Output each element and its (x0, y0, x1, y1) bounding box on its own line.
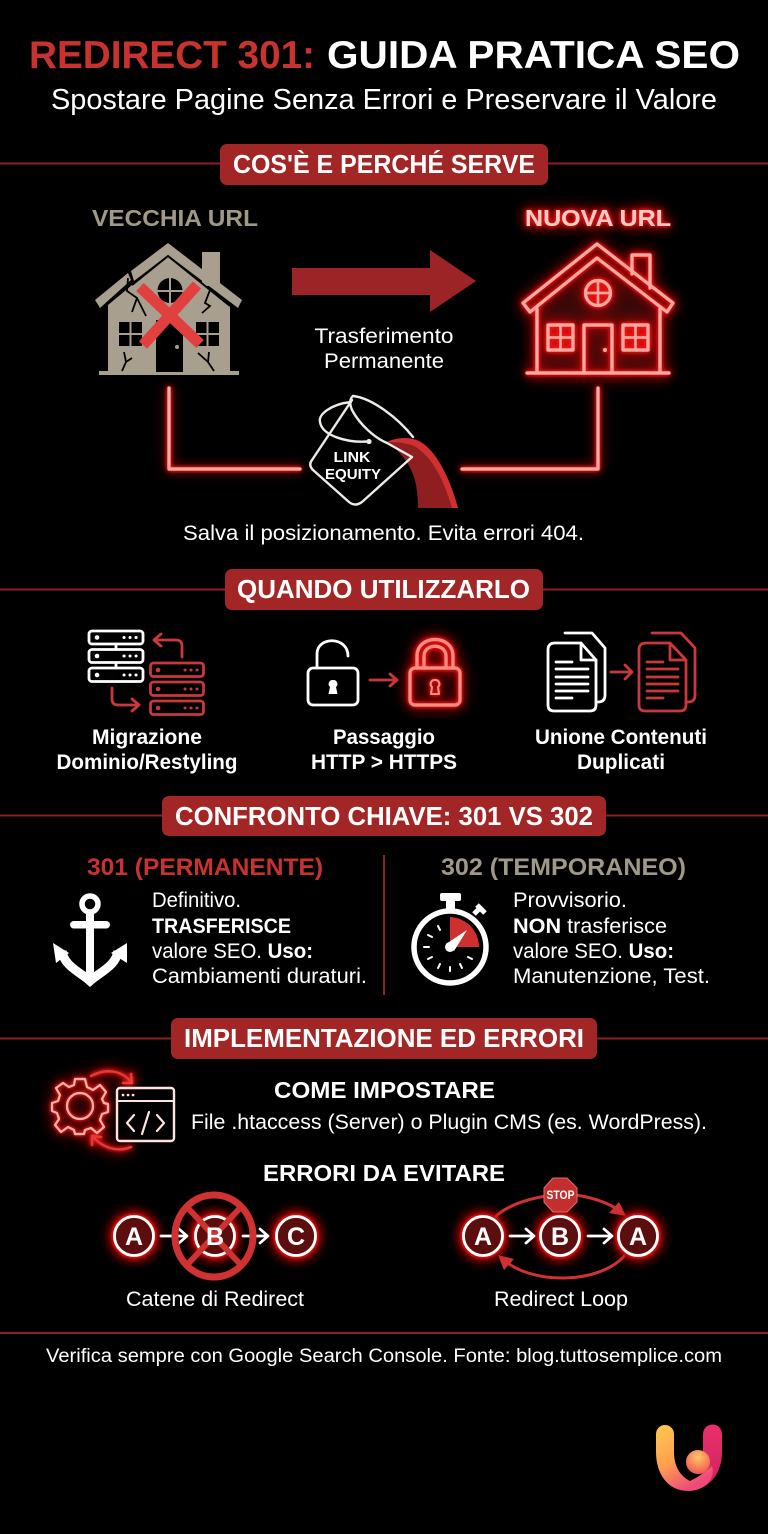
footer note: Verifica sempre con Google Search Console. Fonte: blog.tuttosemplice.com (46, 1346, 722, 1367)
icon: link equity bucket: EQUITY (325, 466, 381, 483)
label: migrazione (56, 726, 238, 774)
arrow: transfer (292, 250, 476, 312)
heading: 302 temporaneo: 302 (TEMPORANEO) (441, 854, 686, 881)
text: 302 description: Manutenzione, Test. (513, 965, 710, 988)
text: 302 description: Provvisorio. (513, 889, 627, 912)
icon: gear and code window (52, 1071, 174, 1149)
subtitle: Spostare Pagine Senza Errori e Preservare il Valore (51, 84, 717, 116)
connector: bucket to new url (462, 388, 598, 469)
text: trasferimento permanente (314, 324, 454, 373)
diagram: redirect loop: A (474, 1223, 492, 1251)
heading: confronto chiave: CONFRONTO CHIAVE: 301 VS 302 (175, 803, 593, 831)
label: redirect loop: Redirect Loop (494, 1288, 628, 1311)
heading: quando utilizzarlo (225, 569, 543, 610)
label: nuova url: NUOVA URL (525, 205, 671, 231)
icon: duplicate documents merged (548, 633, 695, 711)
text: 302 description (513, 889, 710, 988)
label: catene di redirect: Catene di Redirect (126, 1288, 304, 1311)
label: passaggio (311, 726, 457, 774)
heading: confronto chiave (162, 796, 606, 836)
label: unione contenuti: Duplicati (577, 751, 665, 774)
heading: errori da evitare: ERRORI DA EVITARE (263, 1160, 505, 1186)
text: 301 description (152, 889, 367, 988)
diagram: redirect chain (114, 1195, 316, 1277)
label: passaggio: Passaggio (333, 726, 435, 749)
text: 301 description: valore SEO. Uso: (152, 940, 313, 963)
heading: 301 permanente: 301 (PERMANENTE) (87, 854, 323, 881)
diagram: redirect loop (464, 1178, 658, 1278)
icon: server migration (89, 631, 204, 714)
label: unione contenuti: Unione Contenuti (535, 726, 707, 749)
text: trasferimento permanente: Trasferimento (314, 324, 454, 348)
label: migrazione: Migrazione (92, 726, 202, 749)
logo (656, 1424, 722, 1491)
heading: implementazione ed errori: IMPLEMENTAZIONE ED ERRORI (184, 1025, 584, 1053)
diagram: redirect chain: C (287, 1223, 305, 1251)
icon: stopwatch (414, 893, 486, 983)
icon: link equity bucket: LINK (334, 449, 371, 466)
text: trasferimento permanente: Permanente (324, 349, 444, 373)
icon: unlocked to locked (308, 640, 460, 705)
diagram: redirect loop: STOP (546, 1188, 574, 1202)
label: migrazione: Dominio/Restyling (56, 751, 238, 774)
label: passaggio: HTTP > HTTPS (311, 751, 457, 774)
diagram: redirect loop: A (629, 1223, 647, 1251)
text: 302 description: valore SEO. Uso: (513, 940, 674, 963)
connector: old url to bucket (169, 388, 300, 469)
title: GUIDA PRATICA SEO (327, 34, 740, 77)
heading: cos'è e perché serve (220, 144, 548, 185)
label: vecchia url: VECCHIA URL (92, 205, 258, 231)
text: 301 description: Cambiamenti duraturi. (152, 965, 367, 988)
heading: come impostare: COME IMPOSTARE (274, 1077, 495, 1103)
text: 301 description: Definitivo. (152, 889, 241, 912)
heading: cos'è e perché serve: COS'È E PERCHÉ SERVE (233, 150, 535, 179)
text: 302 description: NON trasferisce (513, 915, 667, 938)
icon: neon new house (523, 244, 673, 373)
title: REDIRECT 301: (29, 34, 315, 77)
diagram: redirect chain: A (125, 1223, 143, 1251)
icon: link equity bucket (310, 396, 458, 508)
diagram: redirect loop: B (551, 1223, 569, 1251)
diagram: redirect chain: B (206, 1223, 224, 1251)
heading: quando utilizzarlo: QUANDO UTILIZZARLO (237, 576, 530, 604)
heading: implementazione ed errori (171, 1018, 597, 1059)
text: 301 description: TRASFERISCE (152, 915, 291, 938)
text: come impostare description: File .htaccess (Server) o Plugin CMS (es. WordPress). (191, 1111, 707, 1134)
icon: anchor (53, 896, 127, 985)
title (29, 34, 740, 77)
icon: broken old house (95, 243, 242, 375)
label: unione contenuti (535, 726, 707, 774)
text: salva il posizionamento: Salva il posizionamento. Evita errori 404. (183, 521, 584, 545)
